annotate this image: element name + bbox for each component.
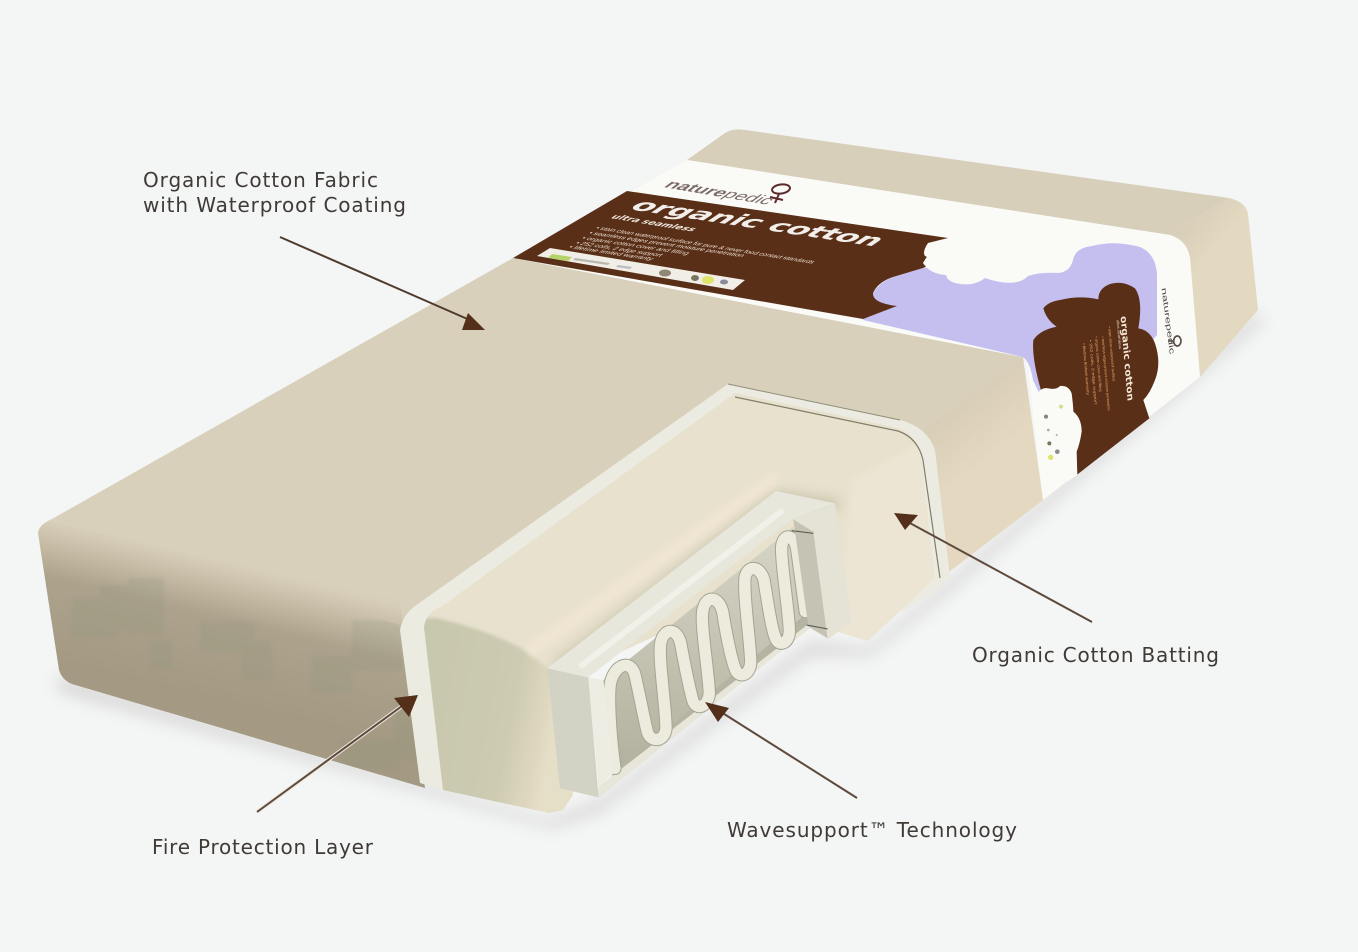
side certification dots bbox=[1044, 405, 1063, 460]
batting front end face bbox=[416, 618, 575, 822]
brown front label bbox=[513, 191, 948, 319]
organic cotton heading: organic cotton bbox=[623, 196, 894, 250]
batting shading bbox=[416, 440, 945, 822]
mattress outer fabric bbox=[38, 129, 1258, 788]
callout: organic cotton batting bbox=[894, 513, 1219, 667]
heading line 1: Organic Cotton Fabric bbox=[143, 168, 378, 192]
arrow bbox=[280, 237, 485, 330]
side brand and product text: • lifetime limited warranty bbox=[1082, 343, 1090, 395]
feature bullets: • 252 coils, 2 edge support bbox=[573, 241, 664, 258]
side brand and product text: • seamless edges prevent moisture penetration bbox=[1101, 336, 1111, 411]
feature bullets: • seamless edges prevent moisture penetration bbox=[586, 231, 746, 258]
cavity back wall bbox=[603, 527, 808, 775]
ultra seamless subheading: ultra seamless bbox=[608, 213, 700, 233]
fire protection layer strip bbox=[400, 384, 950, 790]
callout: fire protection bbox=[152, 695, 418, 859]
right block inner face bbox=[793, 519, 828, 638]
left inner strip bbox=[588, 677, 613, 786]
arrow bbox=[705, 702, 857, 798]
far end top face bbox=[687, 129, 1229, 235]
callout: wavesupport bbox=[705, 702, 1017, 842]
left end block bbox=[547, 668, 599, 797]
certification strip bbox=[537, 248, 745, 290]
batting right block bbox=[838, 440, 945, 650]
side brand and product text: • stain clean waterproof surface bbox=[1107, 326, 1116, 382]
side brand and product text: naturepedic bbox=[1160, 287, 1176, 355]
floor front lip bbox=[598, 624, 809, 797]
left long side bbox=[38, 522, 425, 788]
front brand logo bbox=[770, 183, 791, 203]
top plate bbox=[547, 491, 835, 677]
wavesupport label: Wavesupport™ Technology bbox=[727, 818, 1017, 842]
dark seam line bbox=[735, 397, 940, 578]
callout: organic cotton fabric bbox=[143, 168, 485, 330]
right block black seams bbox=[792, 531, 828, 629]
side logo bbox=[1168, 336, 1181, 346]
notch rim highlight bbox=[527, 649, 532, 657]
mattress ground shadow bbox=[56, 312, 1262, 828]
batting top surface bbox=[424, 393, 935, 813]
wave spring bbox=[610, 537, 805, 768]
feature bullets: • organic cotton cover and filling bbox=[579, 236, 691, 256]
batting label: Organic Cotton Batting bbox=[972, 643, 1219, 667]
retail label band bbox=[513, 160, 1200, 500]
side brand and product text: organic cotton bbox=[1118, 315, 1135, 402]
top plate highlight bbox=[580, 510, 783, 667]
front brand name: naturepedic bbox=[660, 177, 780, 207]
right long side bbox=[925, 357, 1043, 575]
lavender cloud bbox=[863, 243, 1157, 400]
notch shadow bbox=[556, 497, 838, 668]
arrow bbox=[257, 695, 418, 812]
right block outer face bbox=[793, 503, 852, 639]
white side cloud bbox=[1035, 386, 1082, 497]
fire protection label: Fire Protection Layer bbox=[152, 835, 374, 859]
main top face bbox=[38, 258, 1023, 630]
cavity floor bbox=[598, 613, 809, 797]
mattress cutaway infographic bbox=[38, 129, 1261, 858]
side brand and product text: • organic cotton cover and filling bbox=[1094, 336, 1102, 392]
heading line 2: with Waterproof Coating bbox=[143, 193, 406, 217]
far end side face bbox=[1170, 198, 1258, 377]
white band bbox=[513, 160, 1200, 500]
brown side cloud bbox=[1033, 283, 1181, 497]
side brand and product text bbox=[1082, 287, 1176, 411]
white cloud bbox=[923, 240, 1073, 284]
feature bullets: • lifetime limited warranty bbox=[566, 245, 655, 262]
arrow bbox=[894, 513, 1092, 622]
side brand and product text: ultra seamless bbox=[1116, 319, 1122, 349]
feature bullets: • stain clean waterproof surface for pure & never food contact standards bbox=[593, 226, 816, 265]
side mottling bbox=[126, 579, 401, 654]
side brand and product text: • 252 coils, 2 edge support bbox=[1088, 339, 1098, 406]
organic cotton batting layer bbox=[416, 393, 945, 822]
wavesupport coil assembly bbox=[547, 491, 852, 797]
